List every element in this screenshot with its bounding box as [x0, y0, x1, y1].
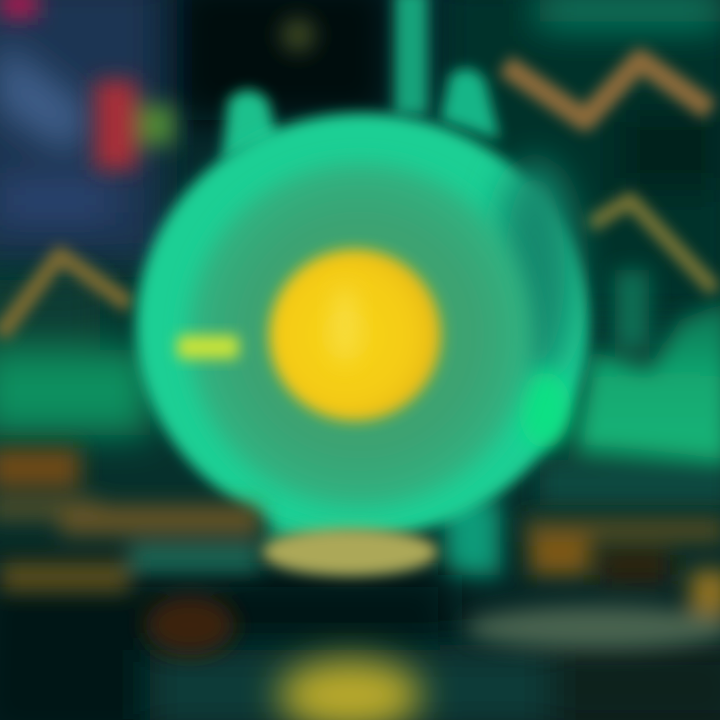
background: dark blue upper-left panel [0, 0, 390, 260]
stem above piggy bank [394, 0, 428, 115]
gold reflection on table [278, 659, 422, 720]
coin slot [177, 335, 239, 359]
feet [268, 490, 500, 575]
center gold coin disc [262, 528, 438, 576]
foreground: dark table surface [0, 575, 720, 720]
chart line: left [0, 255, 130, 335]
body lower-right glow [519, 372, 571, 448]
background: dark teal upper-right panel [440, 0, 720, 320]
coin symbol [331, 287, 359, 363]
chart line: upper right [505, 60, 710, 120]
chart line: right [590, 200, 715, 290]
body right shade [493, 160, 577, 380]
inner circle [188, 163, 532, 507]
coin stacks: left [0, 448, 260, 655]
body [136, 113, 588, 537]
left ear [222, 90, 278, 160]
piggy bank [136, 0, 588, 575]
background: left green glow [0, 280, 150, 435]
background: right bright green area [540, 270, 720, 505]
coin stacks: right [465, 518, 720, 650]
red and magenta market bars [0, 0, 315, 170]
gold coin [269, 249, 441, 421]
right ear [440, 69, 500, 140]
